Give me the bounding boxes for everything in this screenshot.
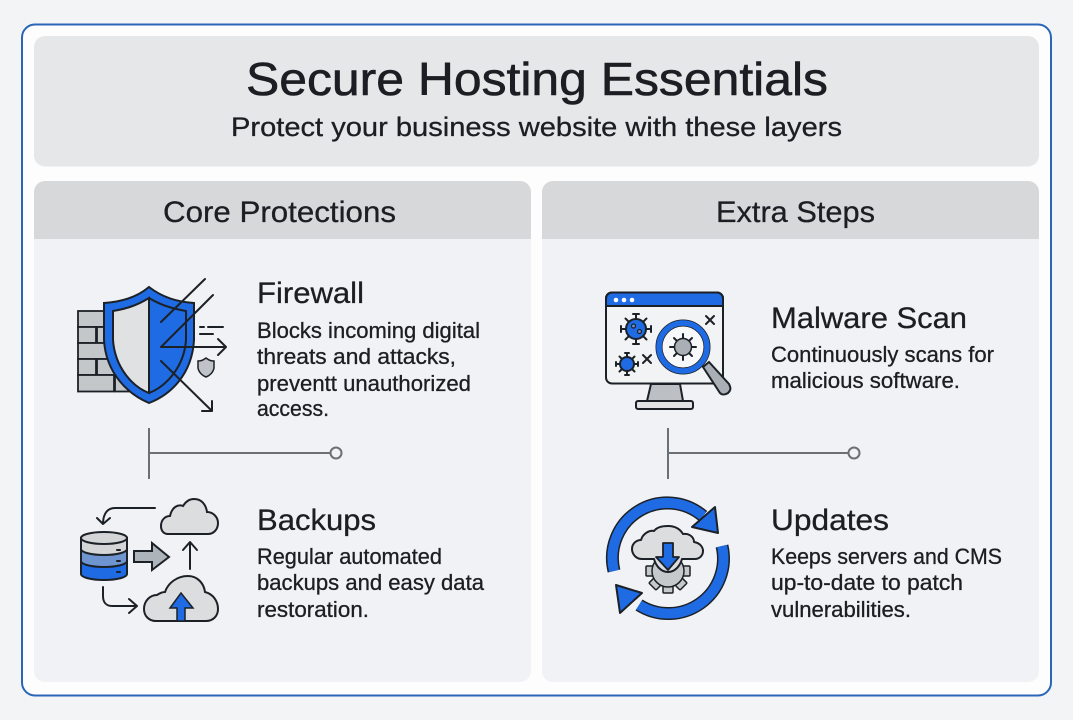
panel header: extra steps: Extra Steps bbox=[716, 196, 875, 229]
panel: core protections bbox=[34, 181, 531, 682]
malware scan text bbox=[771, 302, 994, 393]
backups text: restoration. bbox=[257, 597, 369, 622]
updates text: up-to-date to patch bbox=[771, 570, 963, 595]
connector: core bbox=[149, 428, 342, 479]
updates text: vulnerabilities. bbox=[771, 597, 911, 622]
panel header: extra steps bbox=[542, 181, 1039, 239]
firewall text bbox=[257, 277, 480, 421]
updates text: Updates bbox=[771, 504, 889, 537]
firewall text: Firewall bbox=[257, 277, 364, 310]
updates text: Keeps servers and CMS bbox=[771, 544, 1002, 569]
connector: extra bbox=[668, 428, 860, 479]
firewall text: access. bbox=[257, 396, 329, 421]
backups text: Regular automated bbox=[257, 544, 442, 569]
icon: firewall shield bbox=[78, 279, 226, 411]
icon: malware scan bbox=[606, 292, 730, 409]
backups text: backups and easy data bbox=[257, 570, 485, 595]
malware scan text: Malware Scan bbox=[771, 302, 967, 335]
title banner bbox=[34, 36, 1039, 166]
icon: backups bbox=[81, 499, 218, 621]
panel header: core protections bbox=[34, 181, 531, 239]
panel header: core protections: Core Protections bbox=[163, 196, 396, 229]
malware scan text: malicious software. bbox=[771, 368, 960, 393]
subtitle: Protect your business website with these layers bbox=[231, 112, 842, 142]
panel: extra steps bbox=[542, 181, 1039, 682]
icon: updates bbox=[612, 503, 723, 614]
firewall text: threats and attacks, bbox=[257, 344, 456, 369]
malware scan text: Continuously scans for bbox=[771, 342, 994, 367]
backups text: Backups bbox=[257, 504, 376, 537]
firewall text: preventt unauthorized bbox=[257, 371, 471, 396]
title: Secure Hosting Essentials bbox=[246, 53, 828, 105]
firewall text: Blocks incoming digital bbox=[257, 318, 480, 343]
updates text bbox=[771, 504, 1002, 622]
backups text bbox=[257, 504, 485, 622]
